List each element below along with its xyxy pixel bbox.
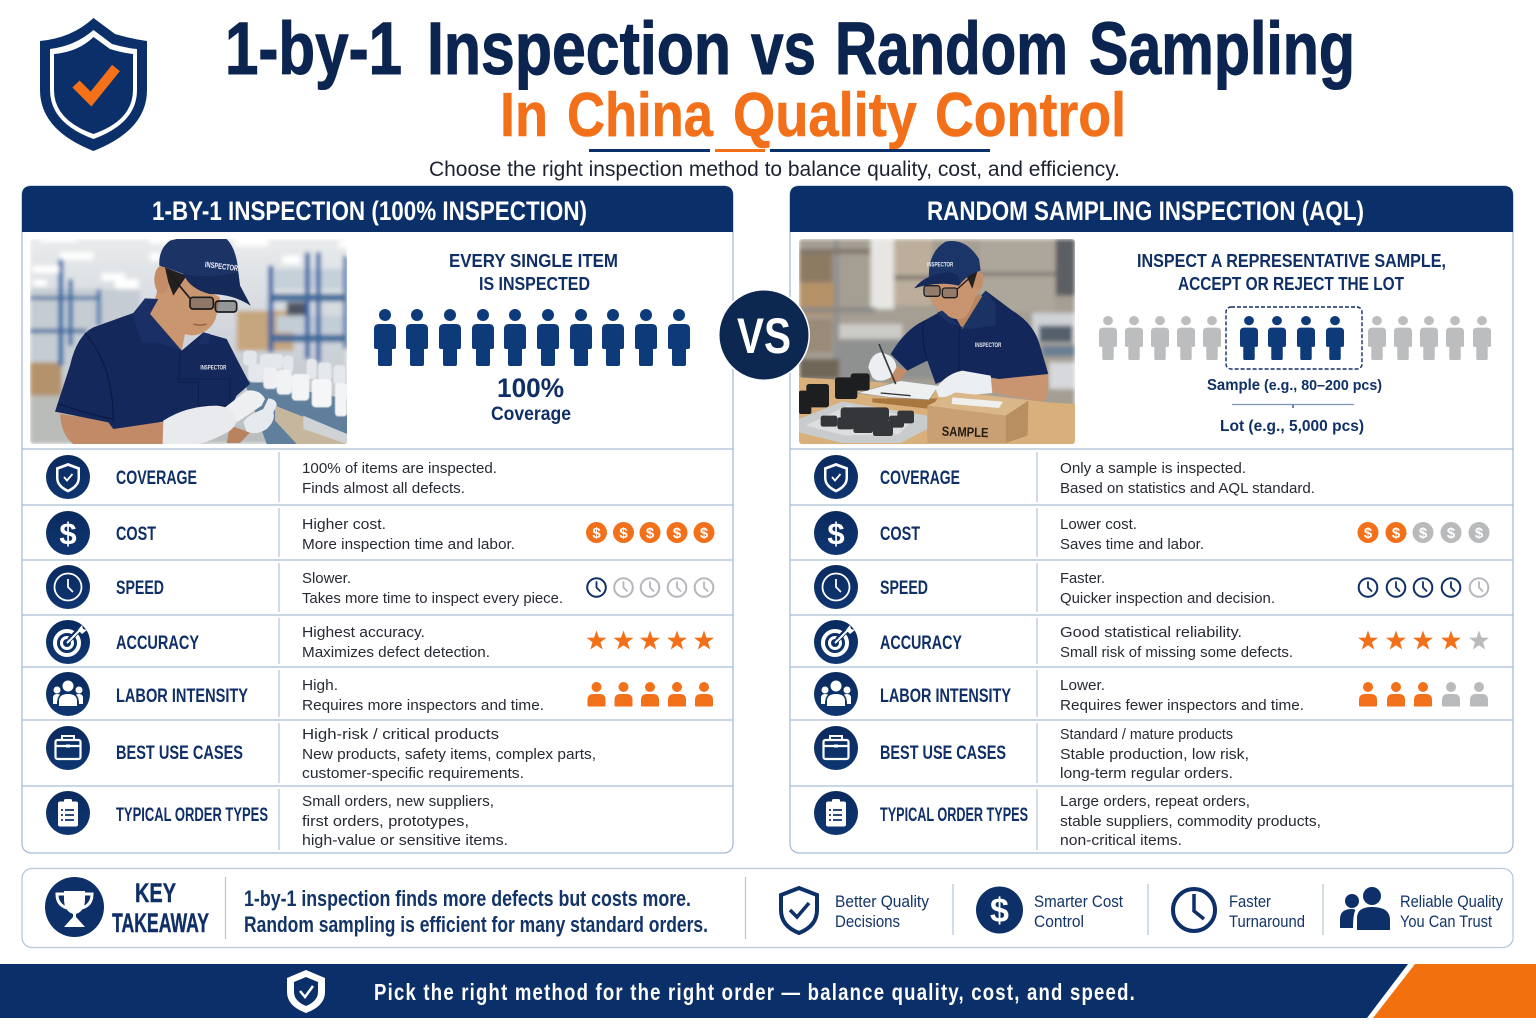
rating: cost 2 of 5	[1358, 522, 1490, 543]
row: cost: $	[827, 516, 845, 551]
icon: banner shield	[287, 970, 325, 1013]
gloves and held item	[225, 390, 265, 422]
photo: inspector checking white bottles: INSPECTOR	[204, 260, 239, 273]
row: best use cases: Stable production, low risk,	[1060, 746, 1249, 763]
black samples	[799, 373, 870, 414]
title: Random	[835, 7, 1068, 90]
row: labor intensity: High.	[302, 677, 338, 694]
row: typical order types: stable suppliers, commodity products,	[1060, 813, 1321, 830]
row: best use cases: customer-specific requirements.	[302, 765, 524, 782]
sample size label: Sample	[1207, 377, 1260, 394]
strip dividers	[226, 877, 1323, 939]
panel header	[22, 186, 733, 232]
row: speed: Slower.	[302, 570, 351, 587]
row: cost: Lower cost.	[1060, 516, 1137, 533]
row: speed: Takes more time to inspect every piece.	[302, 590, 563, 607]
rating: cost 2 of 5: $	[1419, 525, 1428, 542]
sampling callout: ACCEPT OR REJECT THE LOT	[1178, 274, 1404, 294]
panel: random sampling	[790, 186, 1513, 853]
sample size label: (e.g., 80–200 pcs)	[1264, 378, 1382, 394]
row: typical order types: non-critical items.	[1060, 832, 1182, 849]
row: labor intensity: Lower.	[1060, 677, 1105, 694]
subtitle heading: Control	[935, 81, 1126, 150]
panel header	[790, 186, 1513, 232]
row: typical order types: high-value or sensitive items.	[302, 832, 508, 849]
gloves and pen	[868, 352, 896, 381]
benefit: faster turnaround: Turnaround	[1229, 912, 1305, 931]
row: cost: Saves time and labor.	[1060, 536, 1204, 553]
chest label: INSPECTOR	[200, 365, 226, 372]
coverage callout	[449, 251, 618, 294]
rating: cost 5 of 5: $	[673, 525, 682, 542]
row: best use cases: New products, safety items, complex parts,	[302, 746, 596, 763]
row: cost: More inspection time and labor.	[302, 536, 515, 553]
panel header: 1-BY-1 INSPECTION (100% INSPECTION)	[152, 196, 587, 226]
lot size label: Lot (e.g., 5,000 pcs)	[1220, 418, 1364, 435]
rating: cost 5 of 5: $	[646, 525, 655, 542]
photo: inspector with clipboard and sample box: INSPECTOR	[927, 262, 954, 269]
chest label: INSPECTOR	[975, 343, 1002, 349]
table and bottles	[243, 351, 347, 444]
benefit: smarter cost control: Control	[1034, 912, 1084, 931]
tagline: Choose the right inspection method to balance quality, cost, and efficiency.	[429, 157, 1120, 181]
sampling callout	[1137, 251, 1446, 294]
benefit: smarter cost control: Smarter Cost	[1034, 892, 1123, 911]
panel: key takeaway strip	[22, 868, 1513, 948]
row: best use cases: BEST USE CASES	[880, 743, 1006, 764]
row: coverage: 100% of items are inspected.	[302, 460, 497, 477]
clipboard	[872, 398, 937, 409]
rating: cost 5 of 5: $	[700, 525, 709, 542]
benefit: smarter cost control: $	[990, 892, 1009, 930]
title: Sampling	[1089, 7, 1355, 90]
row: speed: Faster.	[1060, 570, 1105, 587]
banner message: Pick the right method for the right order — balance quality, cost, and speed.	[374, 979, 1136, 1005]
row: labor intensity: Requires more inspectors and time.	[302, 697, 544, 714]
key takeaway text: Random sampling is efficient for many standard orders.	[244, 912, 708, 937]
row: coverage	[814, 455, 1315, 499]
photo: inspector with clipboard and sample box	[799, 239, 1075, 444]
row: speed: Quicker inspection and decision.	[1060, 590, 1275, 607]
icon: trophy	[45, 877, 104, 937]
rating: cost 2 of 5: $	[1475, 525, 1484, 542]
glasses	[179, 285, 238, 313]
sample to lot divider	[1232, 404, 1354, 408]
glasses	[924, 274, 974, 298]
title underline	[589, 149, 990, 152]
row: accuracy: Maximizes defect detection.	[302, 644, 490, 661]
sample box	[927, 392, 1028, 416]
arms	[991, 372, 1048, 402]
benefit: smarter cost control	[976, 886, 1123, 934]
pictogram: sample within the lot	[1099, 307, 1491, 369]
row: coverage	[46, 455, 497, 499]
rating: speed 1 of 5	[587, 578, 713, 597]
rating: labor 3 of 5	[1359, 682, 1488, 706]
row: typical order types: first orders, prototypes,	[302, 813, 469, 830]
row: coverage: Finds almost all defects.	[302, 480, 465, 497]
benefit: reliable quality	[1340, 887, 1503, 931]
row: best use cases: Standard / mature products	[1060, 726, 1233, 743]
benefit: faster turnaround	[1173, 889, 1305, 931]
row: labor intensity: LABOR INTENSITY	[116, 686, 248, 707]
coverage callout: EVERY SINGLE ITEM	[449, 251, 618, 271]
row: accuracy: Good statistical reliability.	[1060, 624, 1242, 641]
collar	[937, 291, 996, 329]
rating: accuracy 5 of 5	[586, 630, 714, 650]
row: cost: Higher cost.	[302, 516, 386, 533]
panel header: RANDOM SAMPLING INSPECTION (AQL)	[927, 196, 1364, 226]
rating: labor 5 of 5	[588, 682, 713, 706]
VS badge: VS	[737, 308, 791, 364]
row: best use cases	[814, 726, 1249, 782]
rating: cost 5 of 5	[586, 522, 714, 543]
row dividers	[22, 449, 733, 786]
row: cost: $	[59, 516, 77, 551]
row: speed	[46, 565, 713, 609]
panel: 1-by-1 inspection	[22, 186, 733, 853]
pictogram: ten items all inspected	[374, 309, 690, 366]
100% coverage stat	[491, 373, 571, 425]
subtitle heading: Quality	[733, 81, 917, 150]
subtitle heading: In	[500, 81, 548, 150]
row: labor intensity	[46, 672, 713, 716]
icon: shield with orange check logo	[40, 18, 147, 151]
subtitle heading	[500, 81, 1126, 150]
row: coverage: Based on statistics and AQL standard.	[1060, 480, 1315, 497]
row: best use cases: long-term regular orders.	[1060, 765, 1233, 782]
title: Inspection	[427, 7, 731, 90]
row: typical order types	[814, 791, 1321, 849]
photo: inspector with clipboard and sample box: SAMPLE	[942, 424, 989, 440]
key takeaway label	[112, 878, 209, 938]
polo shirt	[55, 298, 250, 429]
row: labor intensity	[814, 672, 1488, 716]
polo shirt	[891, 291, 1048, 384]
row: cost	[46, 511, 714, 555]
rating: cost 5 of 5: $	[592, 525, 601, 542]
row dividers	[790, 449, 1513, 786]
cap	[159, 239, 251, 306]
row: typical order types: TYPICAL ORDER TYPES	[116, 805, 268, 826]
row: typical order types	[46, 791, 508, 849]
tray	[799, 402, 927, 443]
key takeaway label: TAKEAWAY	[112, 908, 209, 938]
row: best use cases: High-risk / critical products	[302, 726, 499, 743]
row: speed: SPEED	[116, 578, 164, 599]
row: best use cases: BEST USE CASES	[116, 743, 243, 764]
desk	[799, 377, 1075, 444]
key takeaway text	[244, 886, 708, 937]
benefit: reliable quality: You Can Trust	[1400, 912, 1492, 931]
rating: cost 2 of 5: $	[1392, 525, 1401, 542]
bottom banner	[0, 964, 1536, 1018]
row: accuracy: Small risk of missing some defects.	[1060, 644, 1293, 661]
row: accuracy: Highest accuracy.	[302, 624, 425, 641]
row: best use cases	[46, 726, 596, 782]
title: vs	[751, 7, 816, 90]
row: coverage: COVERAGE	[116, 468, 197, 489]
key takeaway text: 1-by-1 inspection finds more defects but costs more.	[244, 886, 691, 911]
100% coverage stat: 100%	[497, 373, 564, 403]
row: cost: COST	[116, 524, 156, 545]
benefit: better quality decisions	[781, 888, 929, 933]
benefit: faster turnaround: Faster	[1229, 892, 1271, 911]
row: speed: SPEED	[880, 578, 928, 599]
face	[150, 278, 220, 350]
rating: cost 2 of 5: $	[1364, 525, 1373, 542]
row: coverage: COVERAGE	[880, 468, 960, 489]
row: cost	[814, 511, 1490, 555]
row: coverage: Only a sample is inspected.	[1060, 460, 1246, 477]
rating: cost 2 of 5: $	[1447, 525, 1456, 542]
coverage callout: IS INSPECTED	[479, 274, 590, 294]
row: cost: COST	[880, 524, 920, 545]
collar	[133, 298, 182, 351]
benefit: reliable quality: Reliable Quality	[1400, 892, 1503, 911]
VS badge	[718, 289, 810, 381]
subtitle heading: China	[567, 81, 713, 150]
row: accuracy: ACCURACY	[880, 633, 962, 654]
photo: inspector checking white bottles	[30, 239, 347, 444]
forearm	[60, 414, 163, 444]
row: labor intensity: Requires fewer inspectors and time.	[1060, 697, 1304, 714]
key takeaway label: KEY	[135, 878, 176, 908]
neck and face	[956, 294, 982, 329]
rating: speed 4 of 5	[1359, 578, 1488, 597]
row: typical order types: Large orders, repeat orders,	[1060, 793, 1250, 810]
rating: cost 5 of 5: $	[619, 525, 628, 542]
row: labor intensity: LABOR INTENSITY	[880, 686, 1011, 707]
cap	[929, 241, 981, 286]
row: typical order types: Small orders, new suppliers,	[302, 793, 494, 810]
row: typical order types: TYPICAL ORDER TYPES	[880, 805, 1028, 826]
row: speed	[814, 565, 1488, 609]
sampling callout: INSPECT A REPRESENTATIVE SAMPLE,	[1137, 251, 1446, 271]
row: accuracy: ACCURACY	[116, 633, 199, 654]
row: accuracy	[46, 620, 714, 664]
title	[225, 7, 1355, 90]
sample size label	[1207, 377, 1382, 394]
100% coverage stat: Coverage	[491, 404, 571, 425]
benefit: better quality decisions: Decisions	[835, 912, 900, 931]
benefit: better quality decisions: Better Quality	[835, 892, 929, 911]
title: 1-by-1	[225, 7, 402, 90]
rating: accuracy 4 of 5	[1358, 630, 1489, 650]
row: accuracy	[814, 620, 1489, 664]
